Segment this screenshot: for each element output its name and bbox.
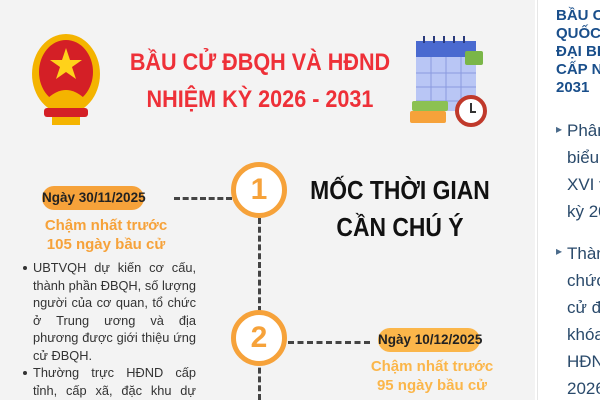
heading: milestones: MỐC THỜI GIAN [310,175,490,205]
step 2 circle: 2 [251,321,267,354]
sidebar title [556,6,600,96]
title: BẦU CỬ ĐBQH VÀ HĐND [130,49,390,76]
timeline dashed line [258,218,261,400]
sidebar bullets: ▸ [556,244,562,258]
date pill 1 [42,186,144,210]
date pill 2: Ngày 10/12/2025 [378,332,482,347]
icon: national emblem [32,34,100,125]
deadline 1 [45,217,167,253]
date pill 1: Ngày 30/11/2025 [42,190,146,205]
deadline 2: Chậm nhất trước [371,358,493,375]
bullet text 1: UBTVQH dự kiến cơ cấu, thành phần ĐBQH, số lượng người của cơ quan, tổ chức ở Trung ương và địa phương được giới thiệu ứng cử ĐBQH. [33,260,196,362]
sidebar [537,0,600,400]
icon: calendar [410,36,487,127]
sidebar title: 2031 [556,79,589,96]
milestone 1 [23,186,196,398]
step 2 circle [231,310,287,366]
connector 1 [174,197,232,200]
step 1 circle [231,162,287,218]
step 1 circle: 1 [251,173,267,206]
milestone 2 [371,328,493,394]
connector 2 [288,341,370,344]
deadline 1: Chậm nhất trước [45,217,167,234]
date pill 2 [378,328,480,352]
deadline 2 [371,358,493,394]
sidebar bullets [556,122,562,258]
sidebar item 1 [567,121,600,221]
heading: milestones: CẦN CHÚ Ý [336,212,464,242]
deadline 2: 95 ngày bầu cử [377,377,487,394]
heading: milestones [310,175,490,242]
sidebar item 2 [567,244,600,398]
deadline 1: 105 ngày bầu cử [47,236,165,253]
subtitle: NHIỆM KỲ 2026 - 2031 [147,86,373,113]
sidebar bullets: ▸ [556,122,562,136]
